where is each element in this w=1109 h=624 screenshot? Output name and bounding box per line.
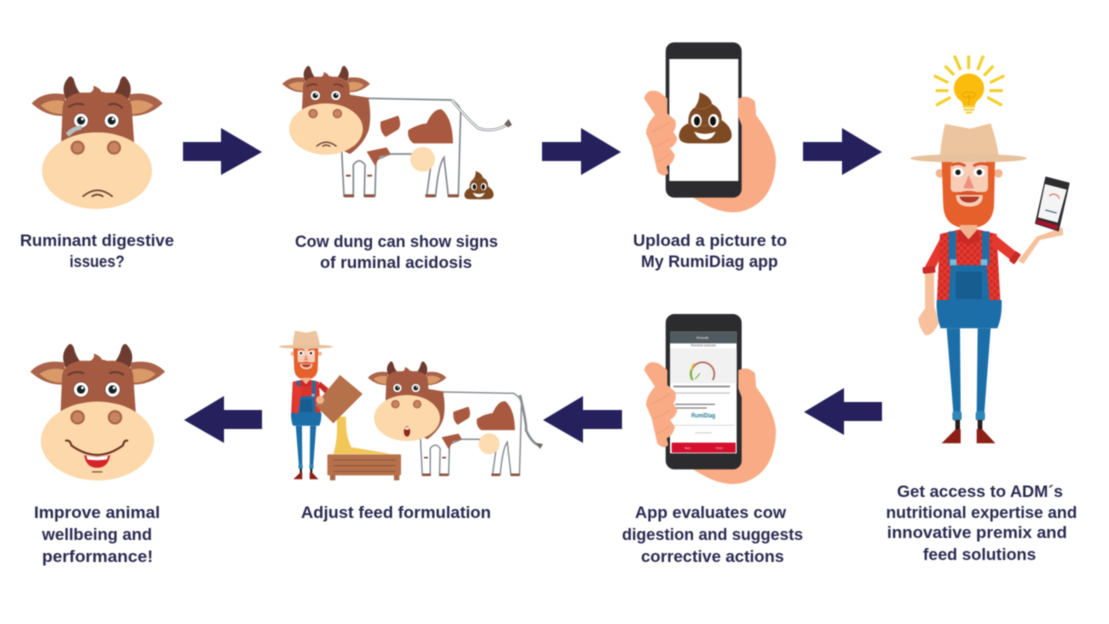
caption: app evaluates: digestion and suggests (622, 525, 803, 544)
arrow 6 (184, 396, 262, 443)
eyebrows (68, 372, 124, 375)
cow head (368, 361, 446, 441)
caption: upload: My RumiDiag app (641, 252, 778, 271)
caption: improve wellbeing: wellbeing and (41, 525, 152, 544)
arrow 5 (543, 396, 622, 443)
step 1: sad cow head (32, 76, 163, 209)
cow tail (520, 395, 541, 446)
caption: ADM: innovative premix and (887, 523, 1067, 542)
app screen: Back (685, 446, 691, 450)
cow body (342, 93, 512, 197)
caption: cow dung: Cow dung can show signs (295, 232, 498, 251)
caption: app evaluates: App evaluates cow (635, 503, 787, 522)
caption: ADM: nutritional expertise and (886, 503, 1077, 522)
step 3: hand holding phone with poop (644, 42, 776, 212)
happy cow head (30, 344, 165, 480)
app screen: RumiDiag (691, 414, 716, 420)
caption: ADM: Get access to ADM´s (897, 482, 1063, 501)
arrow 3 (803, 128, 882, 175)
app screen (670, 332, 737, 453)
caption: ADM: feed solutions (923, 545, 1036, 564)
open mouth (84, 455, 110, 468)
teeth (86, 456, 108, 460)
arrow 2 (542, 128, 621, 175)
phone screen (669, 59, 738, 181)
step 2: cow with dung (282, 66, 512, 199)
icon: small poop (464, 171, 494, 199)
feed box and arm (293, 375, 363, 423)
sad mouth (83, 190, 113, 197)
icon: tear (66, 125, 82, 137)
icon: poop emoji (679, 92, 732, 143)
app screen: Finish (716, 446, 723, 450)
arm, left (918, 234, 950, 335)
caption: improve wellbeing: performance! (42, 547, 153, 566)
cow head (282, 66, 370, 155)
app screen: Ruminal acidosis (691, 343, 716, 347)
caption: improve wellbeing: Improve animal (34, 503, 160, 522)
caption: app evaluates: corrective actions (641, 547, 784, 566)
arm, right, holding phone (992, 177, 1069, 264)
icon: small phone (1036, 177, 1069, 231)
chin (92, 470, 102, 473)
smile (65, 441, 128, 455)
arrow 4 (804, 388, 882, 435)
step: hand holding phone with app result (644, 314, 776, 484)
farmer with light bulb and phone (910, 56, 1069, 443)
icon: light bulb (934, 56, 1004, 113)
caption: cow dung: of ruminal acidosis (320, 253, 472, 272)
caption: ruminant digestive issues: issues? (70, 252, 124, 271)
caption: adjust feed: Adjust feed formulation (301, 503, 491, 522)
tail tuft (536, 443, 543, 449)
cow body (420, 388, 522, 476)
trough and feed (327, 417, 401, 480)
caption: upload: Upload a picture to (633, 231, 787, 250)
small farmer (279, 330, 333, 479)
eyebrows (68, 104, 123, 108)
app screen: Results (697, 336, 709, 340)
arrow 1 (183, 128, 262, 175)
caption: ruminant digestive issues: Ruminant digestive (20, 231, 174, 250)
step: farmer feeding cow (279, 330, 543, 480)
